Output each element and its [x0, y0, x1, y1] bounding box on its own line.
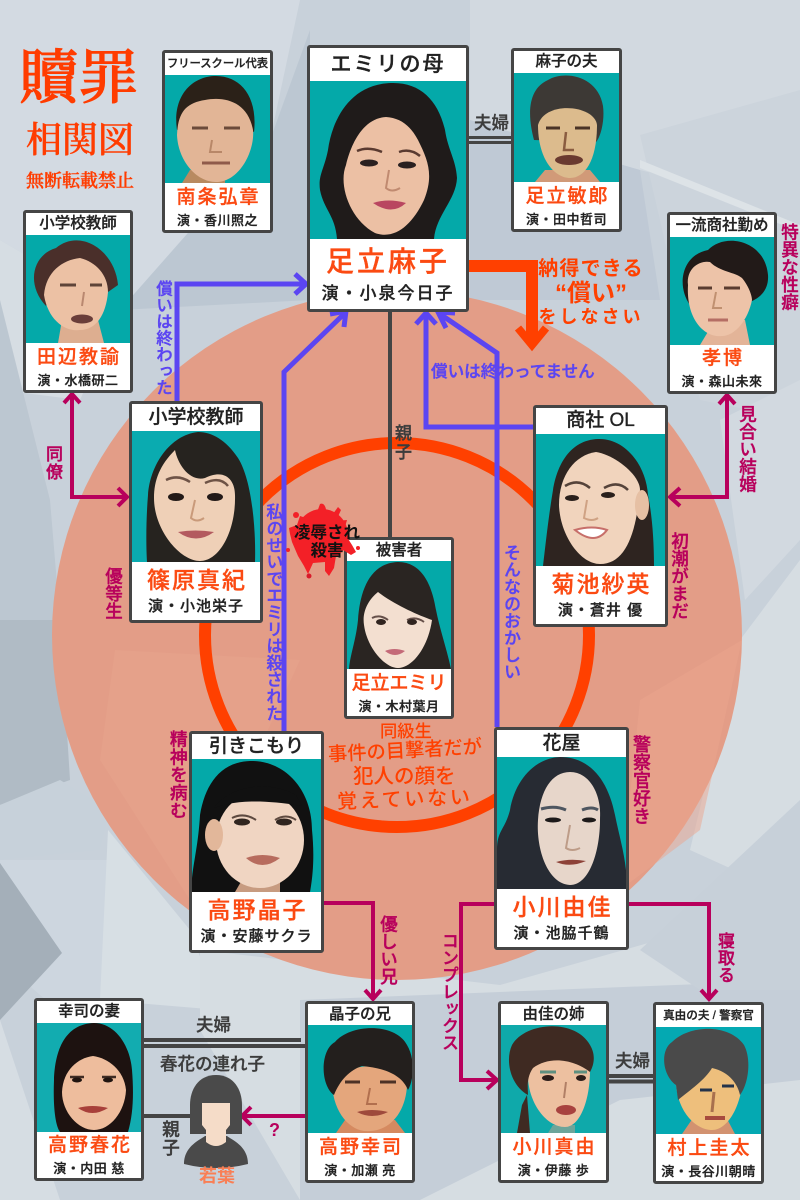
- card: Kohaku: [667, 212, 777, 394]
- label: arranged marriage: 見合い結婚: [738, 405, 758, 492]
- card: Tanabe: [23, 210, 133, 393]
- arrow: Akiko to brother: [324, 903, 381, 999]
- card: Haruka: 演・内田 慈: [53, 1161, 125, 1176]
- arrow: Yuka to Mako: [438, 312, 497, 727]
- label: married Mayu and Keita: 夫婦: [615, 1051, 650, 1071]
- card: Nanjo: 演・香川照之: [177, 213, 258, 228]
- card: Kohaku: 一流商社勤め: [675, 217, 768, 234]
- card: Akiko: 引きこもり: [209, 736, 304, 757]
- card: Mako, Emiri's mother: 足立麻子: [326, 246, 450, 277]
- label: married: 夫婦: [474, 113, 509, 133]
- card: Tanabe: 田辺教諭: [37, 347, 121, 368]
- arrow: Sae to Mako: [416, 313, 533, 427]
- card: Maki: 演・小池栄子: [148, 598, 244, 615]
- label: assaulted and murdered: 殺害: [310, 542, 344, 560]
- card: Haruka: 幸司の妻: [58, 1003, 120, 1020]
- label: parent child: 親子: [392, 424, 411, 462]
- label: peculiar fetish: 特異な性癖: [780, 223, 800, 310]
- line: parent-child Haruka and Wakaba: [144, 1114, 192, 1118]
- card: Maki: 小学校教師: [148, 407, 244, 428]
- card: Toshiro: [511, 48, 622, 232]
- card: Nanjo: フリースクール代表: [167, 58, 268, 70]
- card: Koji: 高野幸司: [319, 1137, 403, 1158]
- card: Kohaku: 孝博: [702, 348, 744, 369]
- card: Koji: 晶子の兄: [329, 1006, 391, 1023]
- card: Akiko: 高野晶子: [208, 897, 308, 923]
- card: Yuka: 演・池脇千鶴: [513, 925, 610, 942]
- arrow: Yuka to Keita: [629, 904, 717, 999]
- card: Mako, Emiri's mother: [307, 45, 469, 312]
- label: likes policeman: 警察官好き: [631, 735, 651, 825]
- card: Emiri: [344, 537, 454, 719]
- card: Keita: 村上圭太: [667, 1138, 752, 1159]
- label: atonement demand: [538, 258, 644, 327]
- label: atonement not over: 償いは終わってません: [431, 362, 595, 381]
- card: Koji: [305, 1001, 415, 1183]
- card: Tanabe: 小学校教師: [39, 215, 117, 232]
- card: Yuka: [494, 727, 629, 950]
- card: Emiri: 足立エミリ: [351, 673, 446, 694]
- label: complex: コンプレックス: [439, 932, 458, 1051]
- card: Toshiro: 足立敏郎: [525, 186, 610, 207]
- card: Sae: 商社 OL: [566, 410, 635, 431]
- card: Mayu: 演・伊藤 歩: [518, 1163, 589, 1178]
- card: Nanjo: [162, 50, 273, 233]
- card: Mako, Emiri's mother: エミリの母: [330, 53, 446, 76]
- label: assaulted and murdered: 凌辱され: [294, 524, 360, 542]
- card: Toshiro: 演・田中哲司: [526, 212, 607, 227]
- line: married Mayu and Keita: [609, 1076, 654, 1082]
- arrow: Mako demand to atone: [469, 266, 546, 345]
- card: Keita: 真由の夫 / 警察官: [663, 1009, 754, 1022]
- arrow: Akiko to Mako: [284, 311, 346, 731]
- label: atonement demand: “償い”: [555, 280, 627, 307]
- label: classmates text: 覚えていない: [337, 787, 473, 813]
- line: married Mako and Toshiro: [469, 138, 511, 142]
- icon: Wakaba silhouette: [184, 1075, 248, 1168]
- label: classmates text: 同級生: [380, 721, 432, 741]
- card: Kohaku: 演・森山未來: [681, 374, 762, 389]
- copyright note: 無断転載禁止: [26, 171, 134, 191]
- card: Maki: 篠原真紀: [147, 567, 247, 593]
- label: steal: 寝取る: [715, 932, 734, 983]
- card: Mayu: 由佳の姉: [522, 1006, 584, 1023]
- card: Keita: 演・長谷川朝晴: [661, 1164, 756, 1179]
- label: atonement demand: をしなさい: [538, 307, 644, 327]
- card: Keita: [653, 1002, 764, 1184]
- label: Haruka's child: 春花の連れ子: [160, 1054, 265, 1074]
- card: Emiri: 被害者: [376, 542, 422, 559]
- arrow: Koji to Wakaba: [242, 1107, 305, 1125]
- label: parent child Haruka: 親子: [160, 1120, 180, 1157]
- card: Tanabe: 演・水橋研二: [37, 373, 118, 388]
- label: colleagues: 同僚: [43, 445, 62, 481]
- card: Akiko: [189, 731, 324, 953]
- label: mental illness: 精神を病む: [168, 730, 188, 819]
- card: Mako, Emiri's mother: 演・小泉今日子: [322, 284, 454, 303]
- arrow: Kohaku and Sae: [670, 395, 735, 506]
- card: Sae: 演・蒼井 優: [558, 602, 643, 619]
- card: Haruka: [34, 998, 144, 1181]
- card: Emiri: 演・木村葉月: [358, 699, 440, 714]
- card: Mayu: 小川真由: [512, 1137, 596, 1158]
- card: Akiko: 演・安藤サクラ: [200, 928, 312, 945]
- label: kind brother: 優しい兄: [378, 915, 398, 985]
- label: question mark: ?: [269, 1120, 280, 1140]
- card: Maki: [129, 401, 263, 623]
- subtitle: 相関図: [26, 120, 134, 160]
- label: honor student: 優等生: [104, 567, 124, 620]
- label: Wakaba: 若葉: [199, 1166, 235, 1186]
- card: Koji: 演・加瀬 亮: [324, 1163, 396, 1178]
- card: Yuka: 花屋: [542, 733, 580, 754]
- card: Sae: [533, 405, 668, 627]
- label: assaulted and murdered: [294, 524, 360, 560]
- card: Nanjo: 南条弘章: [176, 187, 260, 208]
- card: Toshiro: 麻子の夫: [535, 53, 598, 70]
- label: that is wrong: そんなのおかしい: [501, 544, 520, 680]
- card: Haruka: 高野春花: [48, 1135, 132, 1156]
- label: my fault: 私のせいでエミリは殺された: [264, 503, 283, 721]
- label: classmates text: [328, 721, 483, 813]
- label: married Haruka and Koji: 夫婦: [196, 1015, 231, 1035]
- card: Mayu: [498, 1001, 609, 1183]
- splat: blood stain: [286, 504, 360, 578]
- arrow: Tanabe and Maki: [64, 394, 127, 506]
- line: married Haruka and Koji: [144, 1040, 305, 1046]
- line: parent-child Mako to Emiri: [388, 312, 392, 537]
- label: atonement demand: 納得できる: [538, 258, 644, 280]
- label: classmates text: 犯人の顔を: [353, 765, 456, 788]
- label: atonement over: 償いは終わった: [154, 280, 172, 396]
- arrow: Yuka to Mayu: [461, 904, 497, 1089]
- arrow: Maki to Mako: [177, 274, 306, 401]
- title: 贖罪: [19, 45, 139, 111]
- label: classmates text: 事件の目撃者だが: [328, 737, 483, 766]
- card: Sae: 菊池紗英: [552, 571, 652, 597]
- label: menarche: 初潮がまだ: [670, 532, 690, 620]
- card: Yuka: 小川由佳: [512, 894, 612, 920]
